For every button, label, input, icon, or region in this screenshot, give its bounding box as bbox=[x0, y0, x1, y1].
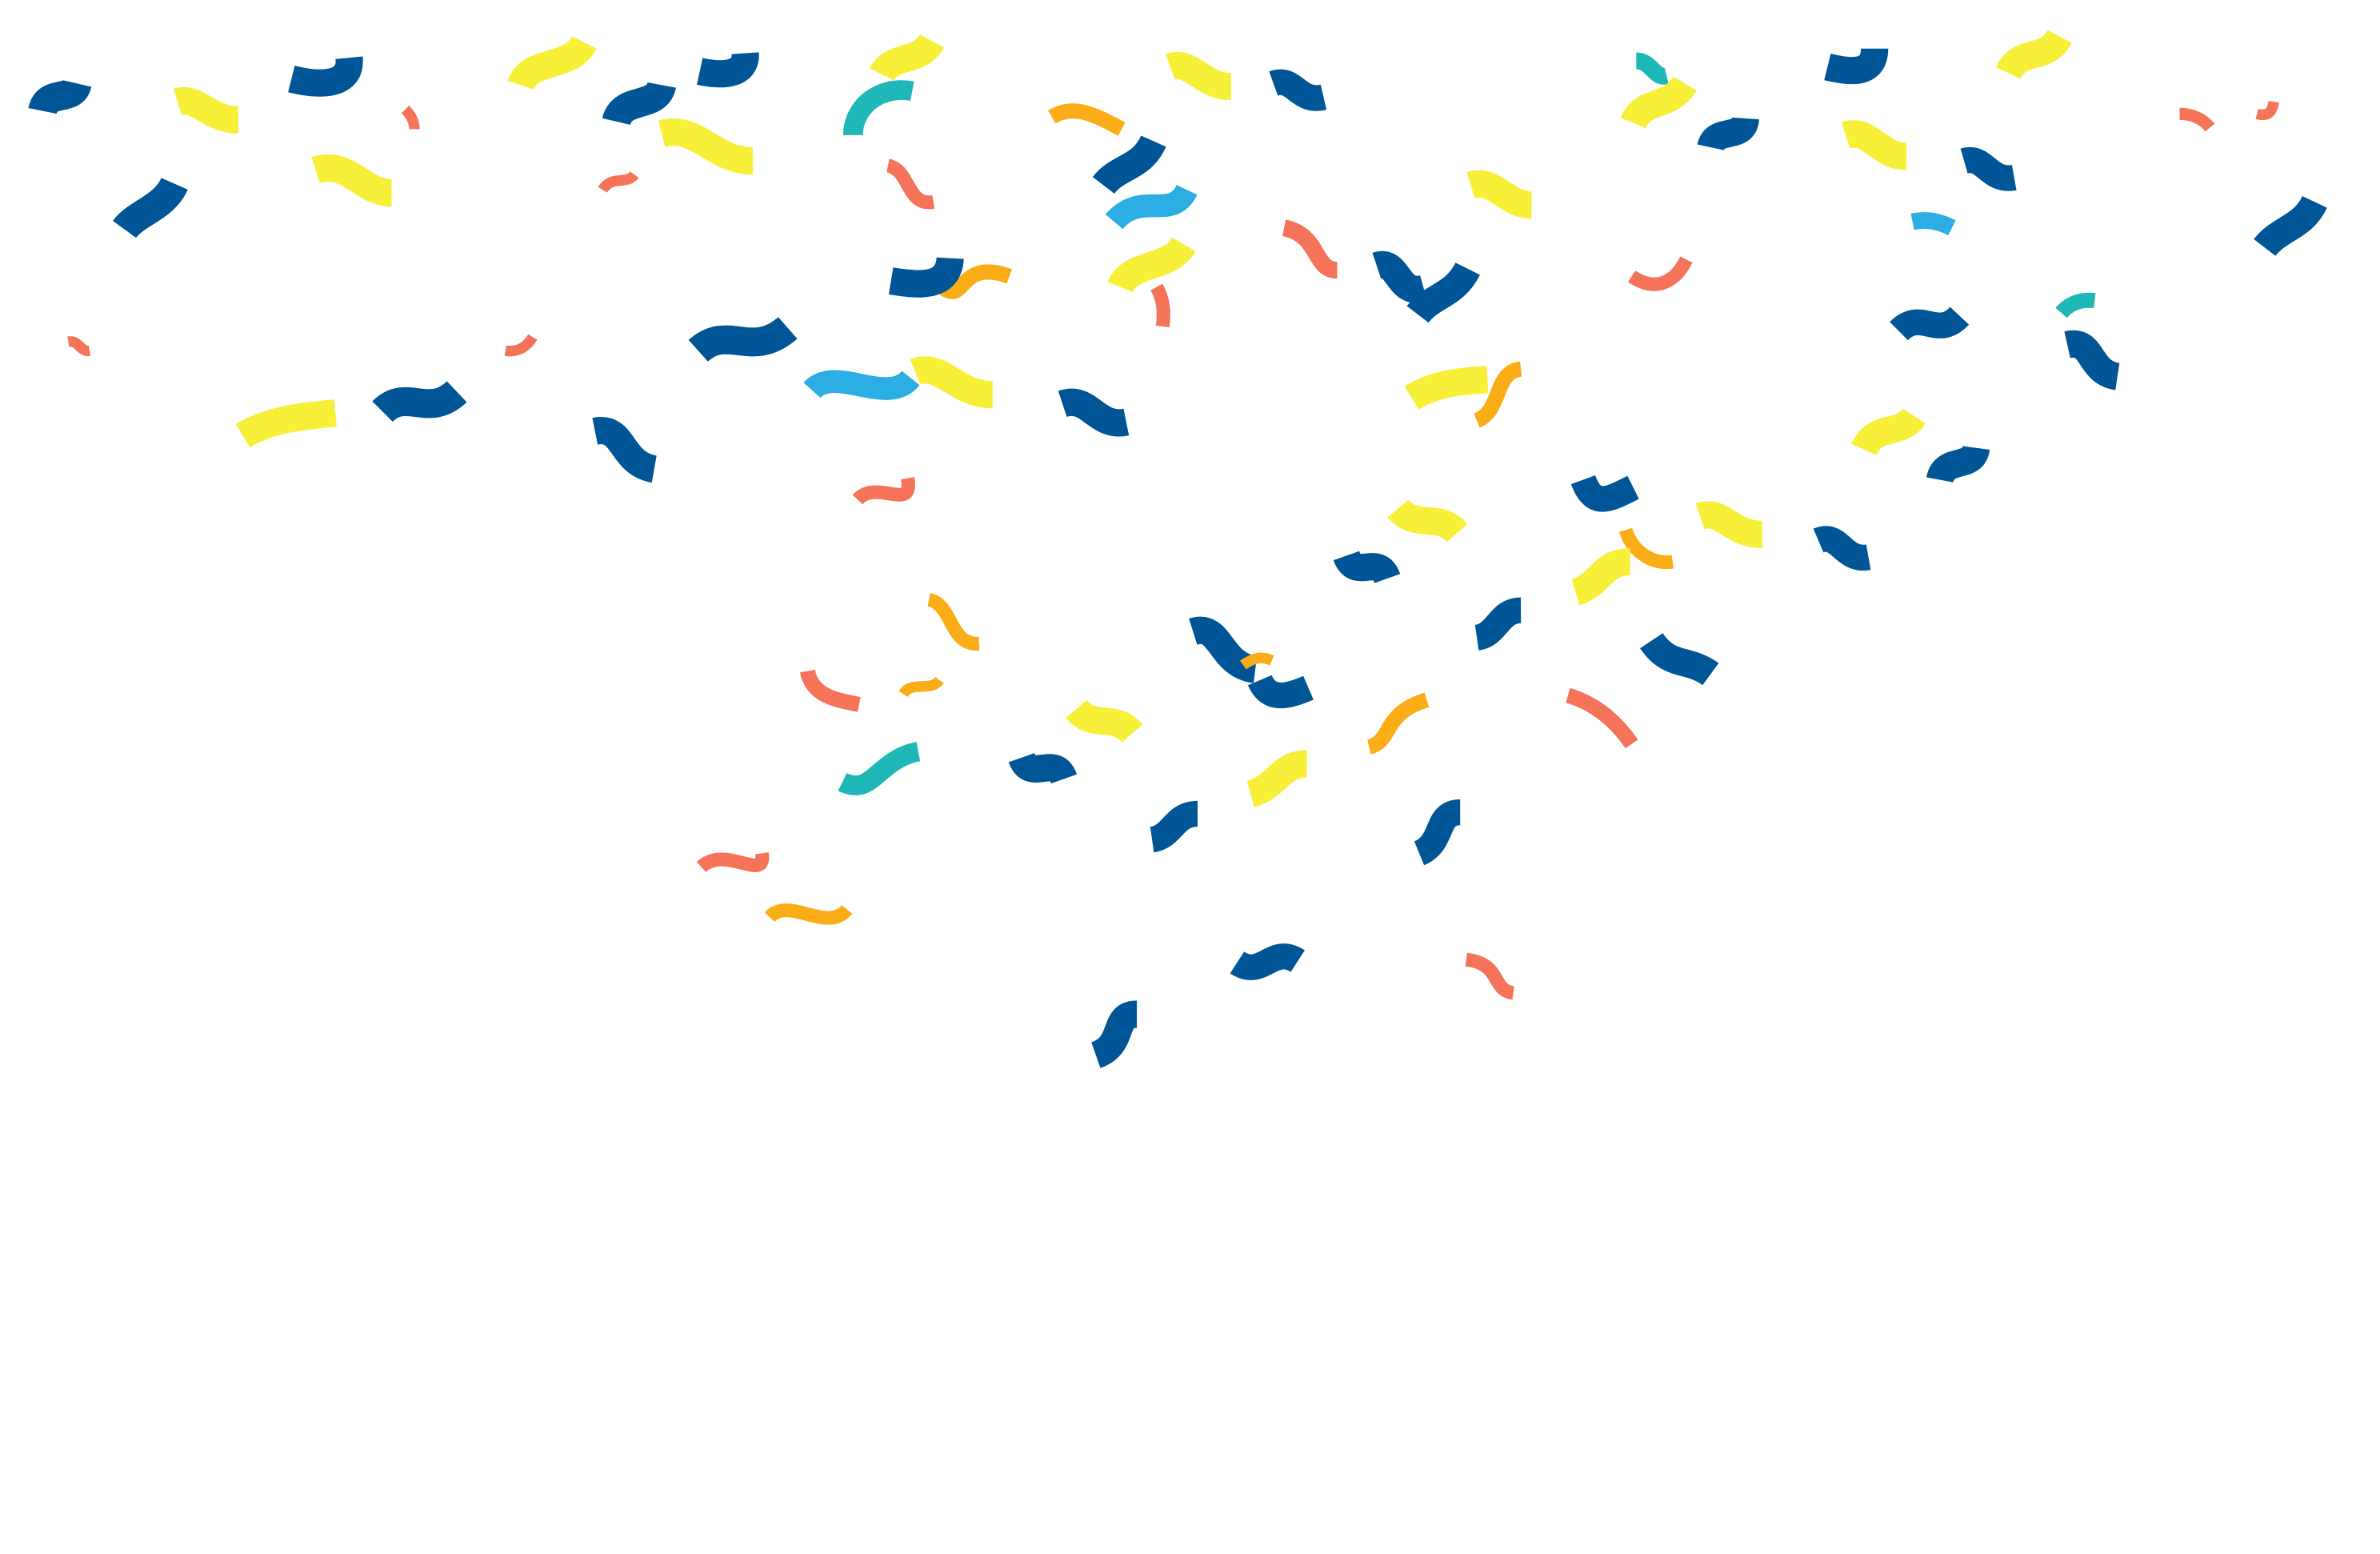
confetti: navy bbox=[891, 258, 950, 284]
confetti: orange bbox=[1243, 658, 1272, 665]
confetti: orange bbox=[770, 910, 847, 918]
confetti: navy bbox=[1477, 611, 1521, 638]
confetti: navy bbox=[1152, 814, 1198, 839]
confetti: coral bbox=[602, 174, 634, 190]
confetti: navy bbox=[1346, 555, 1387, 579]
confetti: sky blue bbox=[812, 378, 910, 391]
confetti: navy bbox=[1419, 812, 1460, 853]
confetti: yellow bbox=[1471, 184, 1531, 205]
confetti: yellow bbox=[2008, 37, 2060, 73]
confetti: navy bbox=[595, 431, 654, 469]
confetti: yellow bbox=[1575, 562, 1630, 592]
confetti: yellow bbox=[1170, 66, 1231, 86]
confetti: navy bbox=[1103, 141, 1154, 186]
confetti: coral bbox=[702, 853, 762, 867]
confetti: coral bbox=[2257, 102, 2274, 114]
confetti: navy bbox=[1096, 1014, 1137, 1055]
confetti: orange bbox=[1477, 369, 1521, 421]
confetti: teal bbox=[853, 90, 912, 135]
confetti: yellow bbox=[178, 101, 238, 120]
confetti: navy bbox=[291, 58, 350, 83]
confetti: navy bbox=[1022, 758, 1064, 779]
confetti: teal bbox=[842, 751, 918, 786]
confetti: coral bbox=[1284, 228, 1338, 270]
confetti: orange bbox=[1626, 530, 1673, 563]
confetti: yellow bbox=[882, 41, 932, 74]
confetti: navy bbox=[698, 328, 788, 350]
confetti: coral bbox=[1157, 287, 1163, 326]
confetti: yellow bbox=[243, 413, 335, 436]
confetti: navy top-left bbox=[42, 83, 78, 111]
confetti: coral bbox=[1632, 259, 1686, 284]
confetti: yellow bbox=[1864, 416, 1914, 450]
confetti: coral bbox=[2180, 114, 2210, 127]
confetti: navy bbox=[1237, 956, 1298, 967]
confetti: yellow bbox=[1846, 134, 1906, 156]
confetti: sky blue bbox=[1114, 190, 1187, 222]
confetti: yellow bbox=[1120, 245, 1184, 287]
confetti: navy bbox=[1274, 82, 1323, 98]
confetti: navy bbox=[1818, 539, 1869, 558]
confetti: teal bbox=[2062, 300, 2094, 313]
confetti: coral bbox=[888, 166, 934, 202]
confetti: navy bbox=[1899, 316, 1959, 331]
confetti: navy bbox=[1377, 265, 1424, 290]
confetti: coral bbox=[1568, 695, 1632, 744]
confetti: yellow bbox=[1076, 709, 1132, 733]
confetti: orange bbox=[903, 680, 939, 694]
confetti: navy bbox=[1710, 118, 1746, 147]
confetti: navy bbox=[700, 53, 746, 74]
confetti: yellow bbox=[915, 370, 993, 395]
confetti: navy bbox=[1193, 631, 1255, 670]
confetti: navy bbox=[1418, 269, 1468, 314]
confetti: orange bbox=[944, 272, 1010, 291]
confetti: yellow bbox=[1412, 379, 1487, 398]
confetti: yellow bbox=[1250, 763, 1307, 794]
confetti: navy bbox=[1062, 403, 1126, 423]
confetti: yellow bbox=[316, 168, 392, 193]
confetti: navy bbox=[2265, 202, 2314, 247]
confetti: orange bbox=[1369, 700, 1426, 747]
confetti: coral bbox=[858, 479, 908, 499]
confetti: navy bbox=[1940, 448, 1976, 480]
confetti: navy bbox=[2067, 344, 2118, 377]
confetti: coral bbox=[68, 342, 90, 350]
confetti: navy bbox=[1260, 680, 1308, 695]
confetti: coral bbox=[406, 110, 414, 129]
confetti: navy bbox=[1827, 49, 1874, 70]
confetti: coral bbox=[1466, 959, 1514, 993]
confetti: coral bbox=[807, 671, 859, 704]
confetti: orange bbox=[1052, 111, 1122, 129]
confetti: navy bbox=[382, 392, 457, 411]
confetti: navy bbox=[1964, 160, 2014, 178]
confetti: yellow bbox=[521, 42, 584, 85]
confetti: orange bbox=[929, 599, 979, 644]
confetti: yellow bbox=[1700, 515, 1762, 535]
confetti: yellow bbox=[1634, 83, 1685, 123]
confetti: navy bbox=[1651, 641, 1710, 674]
confetti: sky blue bbox=[1913, 221, 1952, 228]
confetti: navy bbox=[125, 184, 174, 230]
confetti: navy bbox=[1583, 480, 1634, 499]
confetti: yellow bbox=[662, 132, 753, 161]
confetti: teal bbox=[1636, 61, 1666, 76]
confetti: yellow bbox=[1398, 509, 1457, 533]
confetti: coral bbox=[506, 337, 533, 351]
confetti: navy bbox=[616, 85, 662, 122]
